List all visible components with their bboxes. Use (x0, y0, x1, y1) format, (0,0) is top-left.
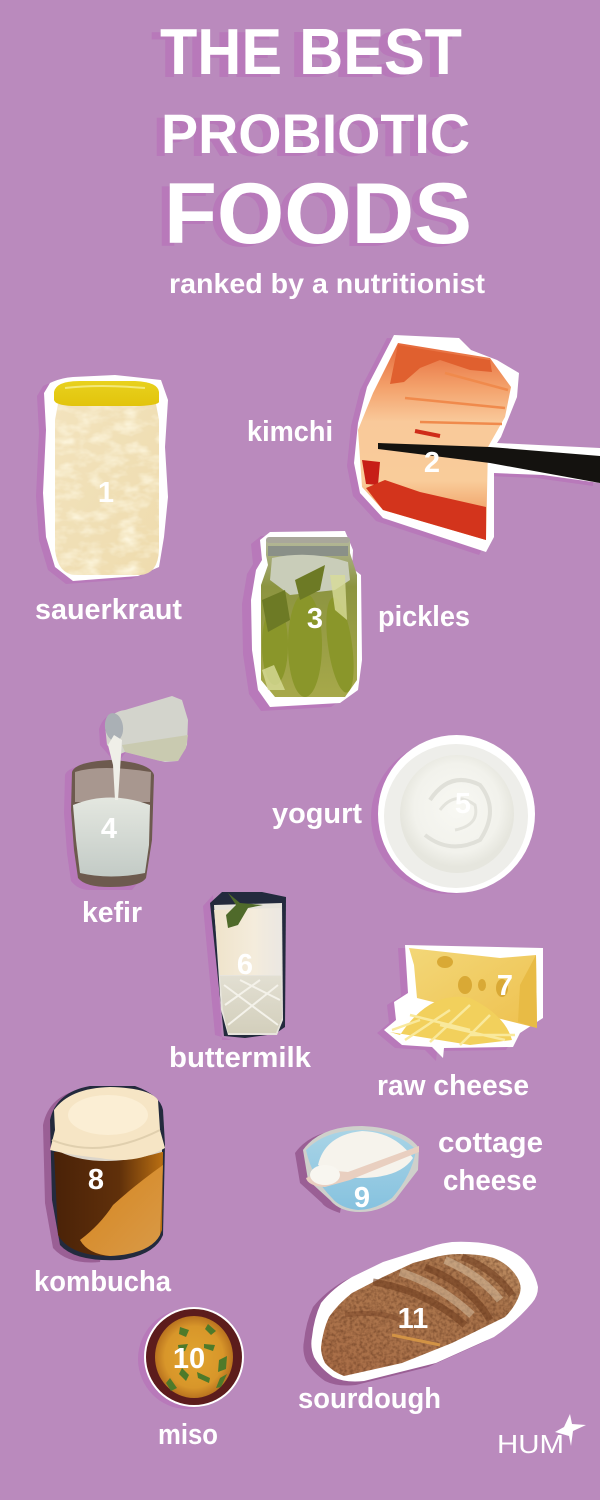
rank numbers: 3 (307, 603, 323, 635)
label: sourdough: sourdough (298, 1383, 441, 1415)
food 3: pickles jar (242, 531, 362, 711)
rank numbers: 1 (98, 477, 114, 509)
title: FOODS (164, 166, 472, 262)
label: cottage cheese: cheese (443, 1165, 537, 1197)
food 9: cottage cheese bowl (295, 1126, 419, 1213)
label: kombucha: kombucha (34, 1266, 172, 1298)
rank numbers: 4 (101, 813, 117, 845)
title: PROBIOTIC (161, 102, 470, 165)
label: pickles: pickles (378, 601, 470, 633)
food 1: sauerkraut jar (36, 375, 168, 584)
rank numbers: 6 (237, 949, 253, 981)
food 6: buttermilk glass (203, 892, 286, 1040)
title: PROBIOTIC (153, 105, 462, 168)
food 11: sourdough loaf (303, 1242, 538, 1386)
label: cottage cheese: cottage (438, 1127, 543, 1159)
title: THE BEST (160, 15, 462, 88)
rank numbers: 7 (497, 970, 513, 1002)
food 8: kombucha jar (43, 1086, 165, 1262)
food 10: miso soup (138, 1307, 244, 1409)
label: raw cheese: raw cheese (377, 1070, 529, 1102)
title (151, 15, 472, 265)
rank numbers: 2 (424, 447, 440, 479)
label: kimchi: kimchi (247, 416, 333, 448)
rank numbers (88, 447, 513, 1375)
label: yogurt: yogurt (272, 798, 362, 830)
rank numbers: 5 (455, 788, 471, 820)
label: sauerkraut: sauerkraut (35, 594, 182, 626)
title: FOODS (156, 169, 464, 265)
logo: HUM (497, 1414, 586, 1459)
rank numbers: 8 (88, 1164, 104, 1196)
label: buttermilk: buttermilk (169, 1042, 312, 1074)
label: miso: miso (158, 1419, 218, 1451)
rank numbers: 9 (354, 1182, 370, 1214)
label: cottage cheese (438, 1127, 543, 1197)
logo: HUM: HUM (497, 1429, 564, 1459)
subtitle: ranked by a nutritionist (169, 268, 485, 299)
label: kefir: kefir (82, 897, 142, 929)
rank numbers: 10 (173, 1343, 205, 1375)
food 5: yogurt bowl (371, 735, 535, 894)
food 7: raw cheese (377, 945, 543, 1061)
rank numbers: 11 (398, 1303, 428, 1335)
food 4: kefir pitcher and glass (64, 696, 188, 890)
labels (34, 416, 543, 1451)
food 2: kimchi with chopsticks (347, 335, 600, 555)
title: THE BEST (151, 18, 453, 91)
